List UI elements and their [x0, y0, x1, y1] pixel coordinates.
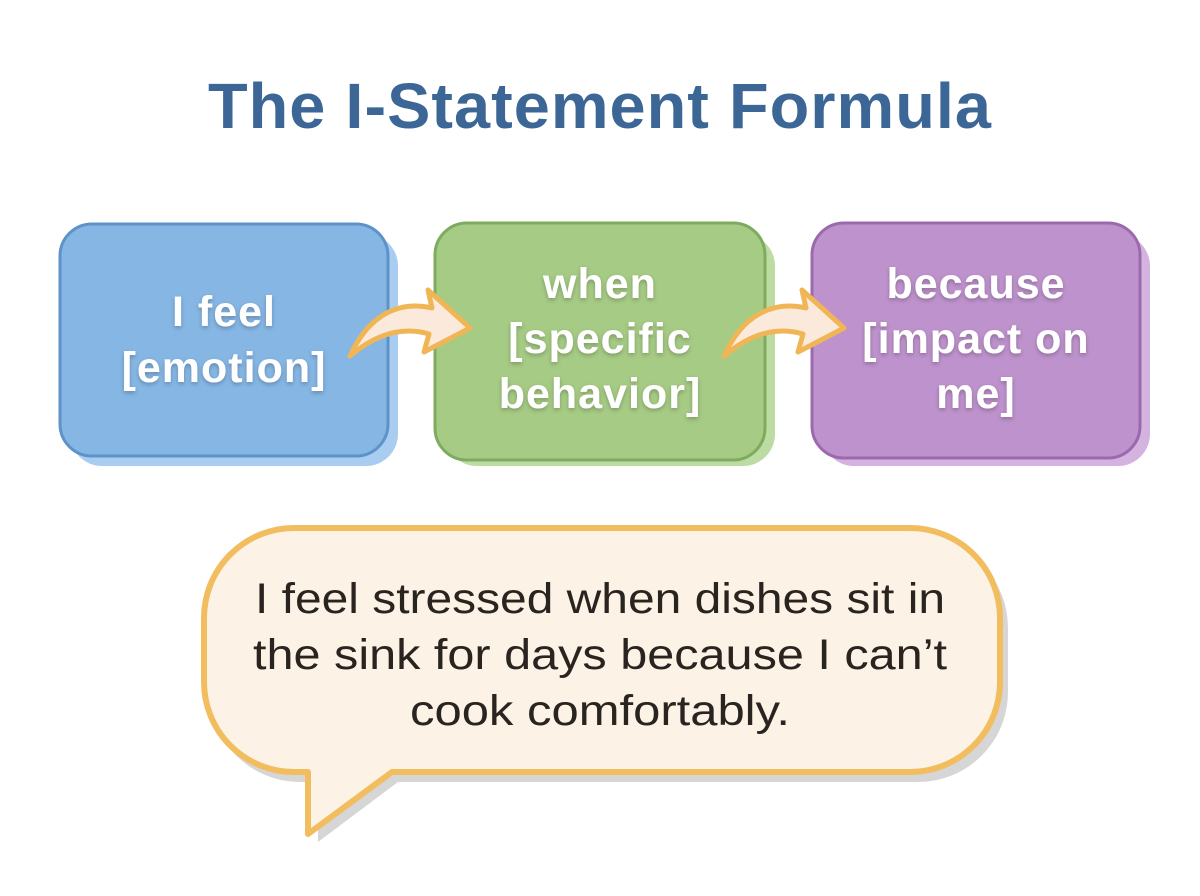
arrow 1 [350, 290, 470, 356]
callout: example speech bubble: the sink for days because I can’t [253, 631, 947, 679]
callout: example speech bubble: I feel stressed when dishes sit in [255, 575, 945, 623]
panel: when: behavior] [499, 370, 701, 418]
panel: because [812, 223, 1150, 466]
panel: when [435, 223, 775, 466]
callout: example speech bubble [204, 528, 1008, 842]
panel: because: because [886, 260, 1066, 308]
panel: I feel: [emotion] [122, 344, 326, 392]
panel: because: me] [936, 370, 1016, 418]
panel: when: when [542, 260, 657, 308]
arrow 2 [724, 290, 844, 356]
panel: I feel [60, 224, 398, 466]
panel: because: [impact on [862, 315, 1090, 363]
callout: example speech bubble: cook comfortably. [410, 687, 790, 735]
panel: I feel: I feel [172, 288, 276, 336]
panel: when: [specific [508, 315, 692, 363]
title: The I-Statement Formula [208, 70, 992, 142]
